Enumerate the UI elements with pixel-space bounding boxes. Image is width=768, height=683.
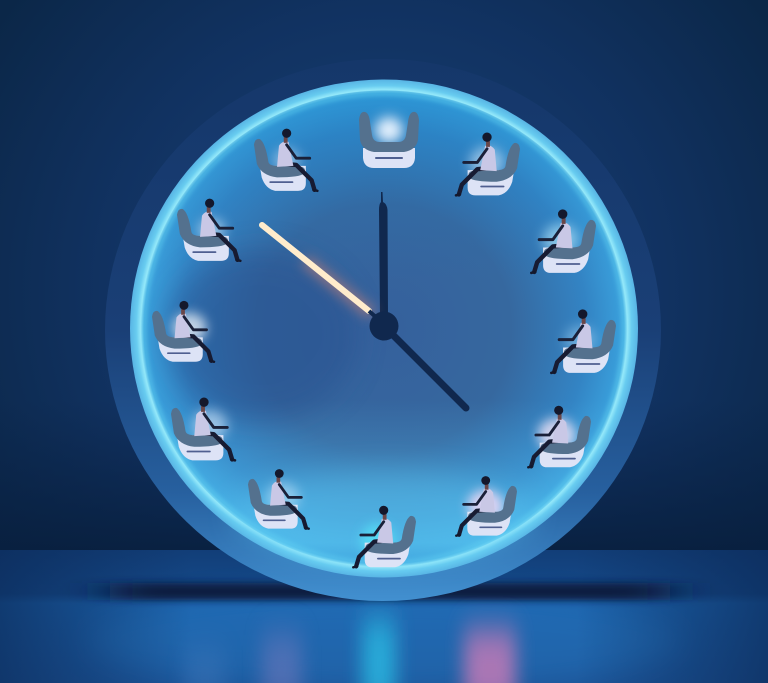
brighter lower face xyxy=(234,470,534,560)
figure: 7 o'clock xyxy=(248,469,309,529)
figure: 11 o'clock xyxy=(254,129,317,191)
center pivot xyxy=(370,312,398,340)
minute hand (dark, pointing up) xyxy=(379,192,388,318)
figure: 4 o'clock xyxy=(528,406,591,467)
figure: 5 o'clock xyxy=(456,476,517,536)
shadow cast by neon hand xyxy=(167,250,357,420)
floor xyxy=(0,550,768,683)
figure: 2 o'clock xyxy=(531,209,596,273)
neon hand tail xyxy=(369,311,378,319)
figure: 8 o'clock xyxy=(171,398,235,460)
neon hand (glowing, upper left) xyxy=(262,225,369,311)
figure: 3 o'clock xyxy=(551,309,616,373)
seat 12 o'clock (empty) xyxy=(359,112,419,168)
clock face xyxy=(130,80,638,578)
neon hand glow xyxy=(305,260,372,314)
clock hands xyxy=(262,192,466,408)
hour hand (dark, lower right) xyxy=(388,330,466,408)
clock outer ring xyxy=(105,59,661,601)
figure: 10 o'clock xyxy=(177,199,240,261)
figure: 6 o'clock xyxy=(353,506,416,567)
figure: 1 o'clock xyxy=(456,133,520,195)
figure: 9 o'clock xyxy=(152,301,214,362)
floor reflections xyxy=(185,620,516,683)
